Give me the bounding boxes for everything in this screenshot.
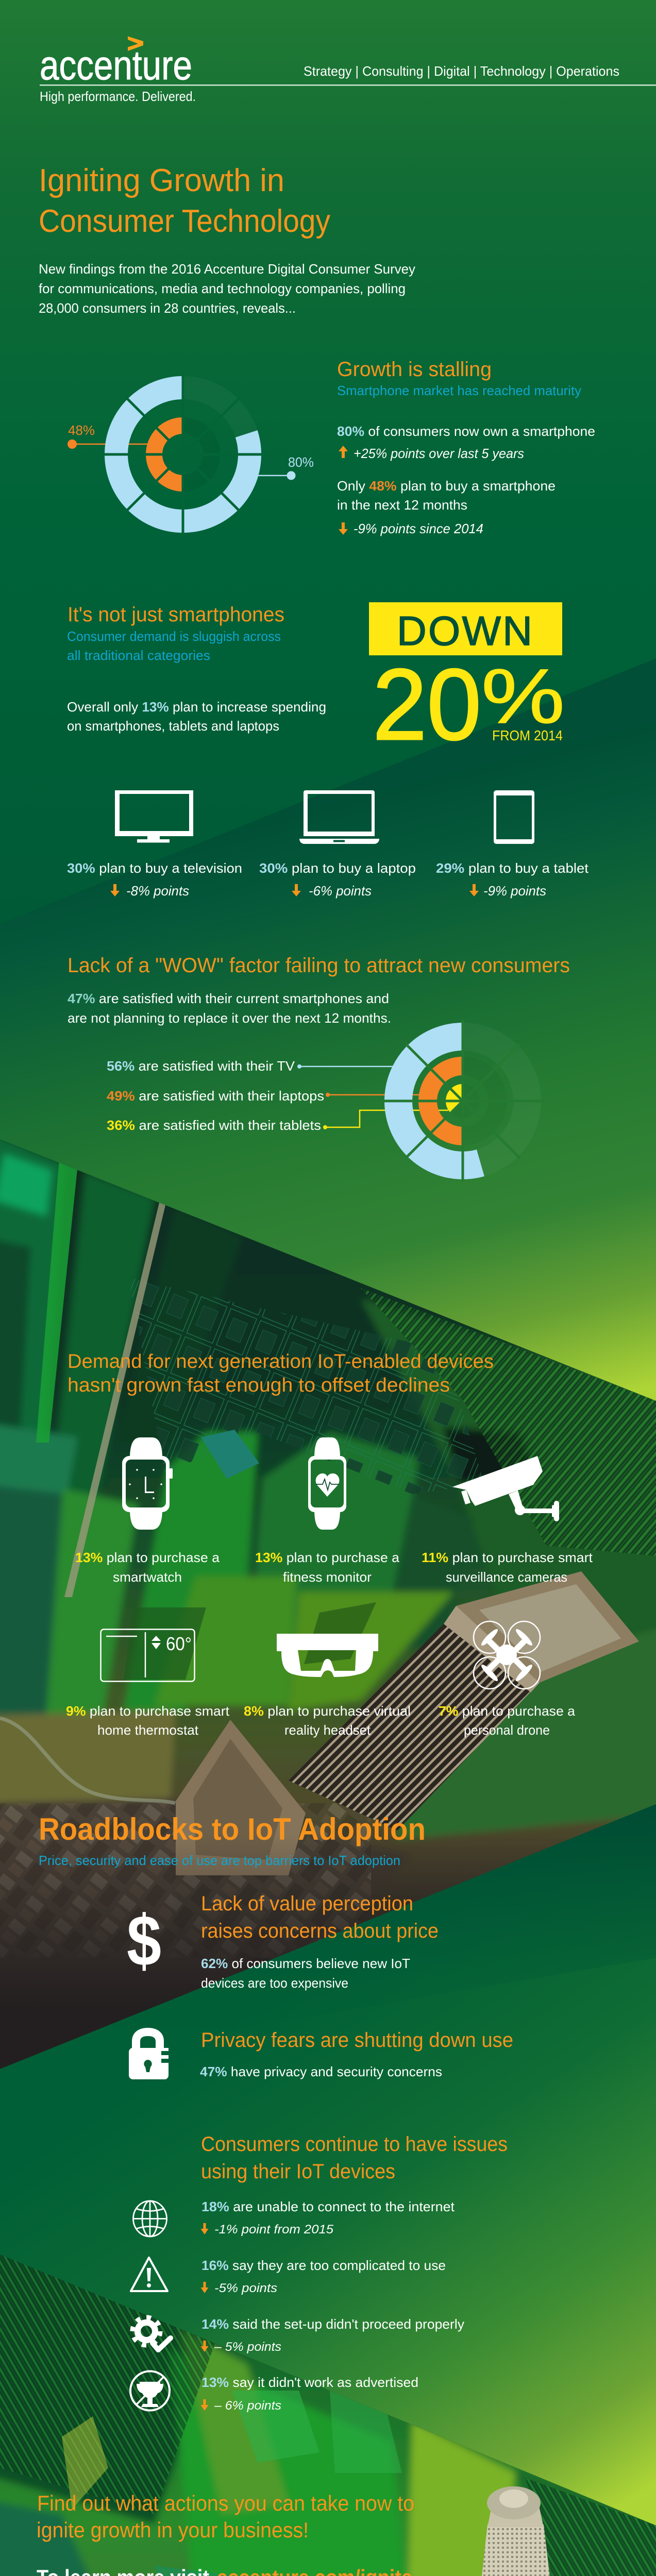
stat 80%: 80% of consumers now own a smartphone — [337, 423, 595, 439]
panel: fitness monitor — [255, 1437, 400, 1585]
callout: down 20% from 2014: DOWN — [397, 608, 532, 654]
logo: accenture — [40, 36, 656, 104]
icon: down arrow — [201, 2223, 208, 2234]
icon: crossed trophy — [130, 2371, 170, 2410]
background: lower diagonal green to lime band — [0, 1804, 656, 2526]
heading: consumers continue to have issues — [201, 2133, 508, 2183]
intro text: for communications, media and technology companies, polling — [39, 281, 406, 296]
stat — [255, 1550, 400, 1585]
panel: surveillance cameras — [422, 1456, 593, 1585]
icon: thermostat — [101, 1629, 195, 1682]
issue: too complicated — [131, 2258, 446, 2295]
text: 47% satisfied: 47% are satisfied with their current smartphones and — [68, 991, 389, 1006]
stat: 16% say they are too complicated to use — [201, 2258, 446, 2273]
callout: down 20% from 2014: FROM 2014 — [492, 727, 563, 743]
trend up: +25% points over last 5 years — [354, 446, 524, 461]
stat: 18% are unable to connect to the internet — [201, 2199, 455, 2214]
heading: demand for IoT devices: Demand for next generation IoT-enabled devices — [68, 1351, 494, 1372]
icon: dollar: $ — [127, 1900, 161, 1981]
stat — [244, 1703, 411, 1738]
stat: 8% plan to purchase virtual — [244, 1703, 411, 1719]
donut chart: smartphone ownership — [68, 374, 314, 536]
label: laptop satisfaction: 49% are satisfied with their laptops — [107, 1088, 324, 1104]
intro text: 28,000 consumers in 28 countries, reveals... — [39, 300, 296, 316]
trend: – 6% points — [214, 2399, 281, 2413]
panel: VR headset — [244, 1634, 411, 1738]
panel: growth is stalling — [337, 358, 595, 536]
callout: down 20% from 2014: 20 — [373, 648, 481, 761]
panel: privacy fears — [129, 2029, 513, 2079]
trend: -6% points — [309, 883, 372, 899]
stat — [422, 1550, 593, 1585]
call to action heading — [37, 2491, 414, 2542]
stat: 9% plan to purchase smart — [66, 1703, 230, 1719]
label: tablet satisfaction: 36% are satisfied with their tablets — [107, 1117, 321, 1133]
stat — [439, 1703, 576, 1738]
title: Consumer Technology — [39, 204, 330, 239]
stat 13% — [67, 699, 326, 734]
icon: smartwatch — [122, 1437, 173, 1530]
navigation text: Strategy | Consulting | Digital | Technology | Operations — [304, 63, 619, 79]
callout: down 20% from 2014 — [369, 602, 565, 761]
title: Igniting Growth in — [39, 163, 284, 198]
heading: Privacy fears are shutting down use — [201, 2029, 513, 2052]
icon: warning triangle — [131, 2258, 167, 2291]
stat: 14% said the set-up didn't proceed properly — [201, 2316, 464, 2332]
call to action links — [37, 2565, 420, 2576]
icon: thermostat: 60° — [166, 1633, 192, 1654]
panel: laptop — [259, 790, 416, 899]
stat: 62% of consumers believe new IoT — [201, 1956, 410, 1971]
heading: Lack of value perception — [201, 1892, 413, 1915]
trend: -8% points — [126, 883, 189, 899]
stat 48%: Only 48% plan to buy a smartphone — [337, 478, 556, 494]
icon: television — [115, 790, 193, 843]
panel: television — [67, 790, 242, 899]
panel: smartwatch — [75, 1437, 220, 1585]
trend down: -9% points since 2014 — [354, 521, 483, 536]
label: TV satisfaction: 56% are satisfied with their TV — [107, 1058, 295, 1074]
icon: padlock — [129, 2032, 169, 2079]
heading: It's not just smartphones — [68, 603, 284, 626]
subheading: Smartphone market has reached maturity — [337, 383, 581, 398]
stat: personal drone — [464, 1722, 550, 1738]
intro text: New findings from the 2016 Accenture Digital Consumer Survey — [39, 261, 415, 277]
heading: Growth is stalling — [337, 358, 492, 381]
stat: 13% plan to purchase a — [75, 1550, 220, 1565]
stat: surveillance cameras — [446, 1569, 567, 1585]
photo panel: digital city aerial — [0, 1139, 656, 1978]
icon: down arrow — [110, 884, 120, 896]
call to action heading: ignite growth in your business! — [37, 2518, 309, 2542]
logo wordmark: accenture — [40, 42, 192, 88]
icon: globe — [133, 2201, 167, 2236]
subheading: all traditional categories — [67, 648, 210, 663]
heading: demand for IoT devices: hasn't grown fast enough to offset declines — [68, 1375, 450, 1396]
stat: 30% plan to buy a laptop — [259, 860, 416, 876]
stat: smartwatch — [113, 1569, 182, 1585]
issue: not as advertised — [130, 2371, 418, 2413]
stat: home thermostat — [97, 1722, 199, 1738]
heading: raises concerns about price — [201, 1920, 439, 1942]
subheading — [67, 629, 281, 663]
title — [39, 163, 330, 239]
call to action heading: Find out what actions you can take now to — [37, 2491, 414, 2515]
icon: tablet — [494, 790, 534, 844]
stat — [75, 1550, 220, 1585]
stat: fitness monitor — [283, 1569, 372, 1585]
donut chart: satisfaction — [107, 1020, 544, 1182]
icon: down arrow — [339, 522, 348, 535]
stat: devices are too expensive — [201, 1975, 348, 1991]
panel: tablet — [436, 790, 589, 899]
icon: drone — [474, 1621, 540, 1689]
text: 47% satisfied: are not planning to replace it over the next 12 months. — [68, 1010, 391, 1026]
background: diagonal dark-to-lime band — [0, 658, 656, 1406]
logo chevron — [128, 36, 143, 51]
stat 13%: Overall only 13% plan to increase spending — [67, 699, 326, 715]
icon: fitness band — [308, 1437, 346, 1530]
subheading: Consumer demand is sluggish across — [67, 629, 281, 644]
stat 48%: in the next 12 months — [337, 497, 467, 513]
text: 47% satisfied — [68, 991, 391, 1026]
intro text — [39, 261, 415, 316]
icon: down arrow — [201, 2399, 208, 2411]
stat: 11% plan to purchase smart — [422, 1550, 593, 1565]
heading: consumers continue to have issues: Consumers continue to have issues — [201, 2133, 508, 2156]
panel: price concerns — [127, 1892, 439, 1991]
stat 48% — [337, 478, 556, 513]
icon: up arrow — [339, 446, 348, 458]
heading: roadblocks to IoT adoption: Roadblocks to IoT Adoption — [39, 1812, 426, 1846]
stat: 7% plan to purchase a — [439, 1703, 576, 1719]
stat — [201, 1956, 410, 1991]
icon: down arrow — [469, 884, 479, 896]
trend: -9% points — [483, 883, 546, 899]
icon: VR headset — [277, 1634, 378, 1677]
stat: 47% have privacy and security concerns — [200, 2064, 442, 2079]
logo tagline: High performance. Delivered. — [40, 89, 196, 104]
icon: gear with check — [132, 2317, 171, 2350]
icon: laptop — [299, 790, 379, 844]
heading: demand for IoT devices — [68, 1351, 494, 1396]
panel: smart thermostat — [66, 1629, 230, 1738]
photo panel: tower and city aerial — [0, 2236, 656, 2576]
label 48%: 48% — [68, 422, 95, 438]
stat 13%: on smartphones, tablets and laptops — [67, 718, 279, 734]
background: top green gradient — [0, 0, 656, 1185]
callout: down 20% from 2014: % — [481, 653, 565, 739]
stat: 13% plan to purchase a — [255, 1550, 400, 1565]
stat: 13% say it didn't work as advertised — [201, 2375, 418, 2390]
icon: down arrow — [292, 884, 301, 896]
issue: set-up problems — [132, 2316, 464, 2354]
panel: personal drone — [439, 1621, 576, 1738]
heading: consumers continue to have issues: using their IoT devices — [201, 2160, 395, 2183]
icon: down arrow — [201, 2341, 208, 2352]
trend: -5% points — [214, 2281, 277, 2295]
subheading: barriers: Price, security and ease of use are top barriers to IoT adoption — [39, 1853, 400, 1868]
stat: 30% plan to buy a television — [67, 860, 242, 876]
trend: -1% point from 2015 — [214, 2223, 334, 2236]
icon: down arrow — [201, 2282, 208, 2293]
stat: 29% plan to buy a tablet — [436, 860, 589, 876]
heading — [201, 1892, 439, 1942]
label 80%: 80% — [288, 454, 314, 470]
issue: unable to connect — [133, 2199, 455, 2236]
stat — [66, 1703, 230, 1738]
stat: reality headset — [284, 1722, 371, 1738]
heading: lack of wow factor: Lack of a "WOW" factor failing to attract new consumers — [68, 954, 570, 977]
panel: it's not just smartphones — [67, 603, 326, 734]
icon: surveillance camera — [452, 1456, 559, 1521]
trend: – 5% points — [214, 2340, 281, 2354]
